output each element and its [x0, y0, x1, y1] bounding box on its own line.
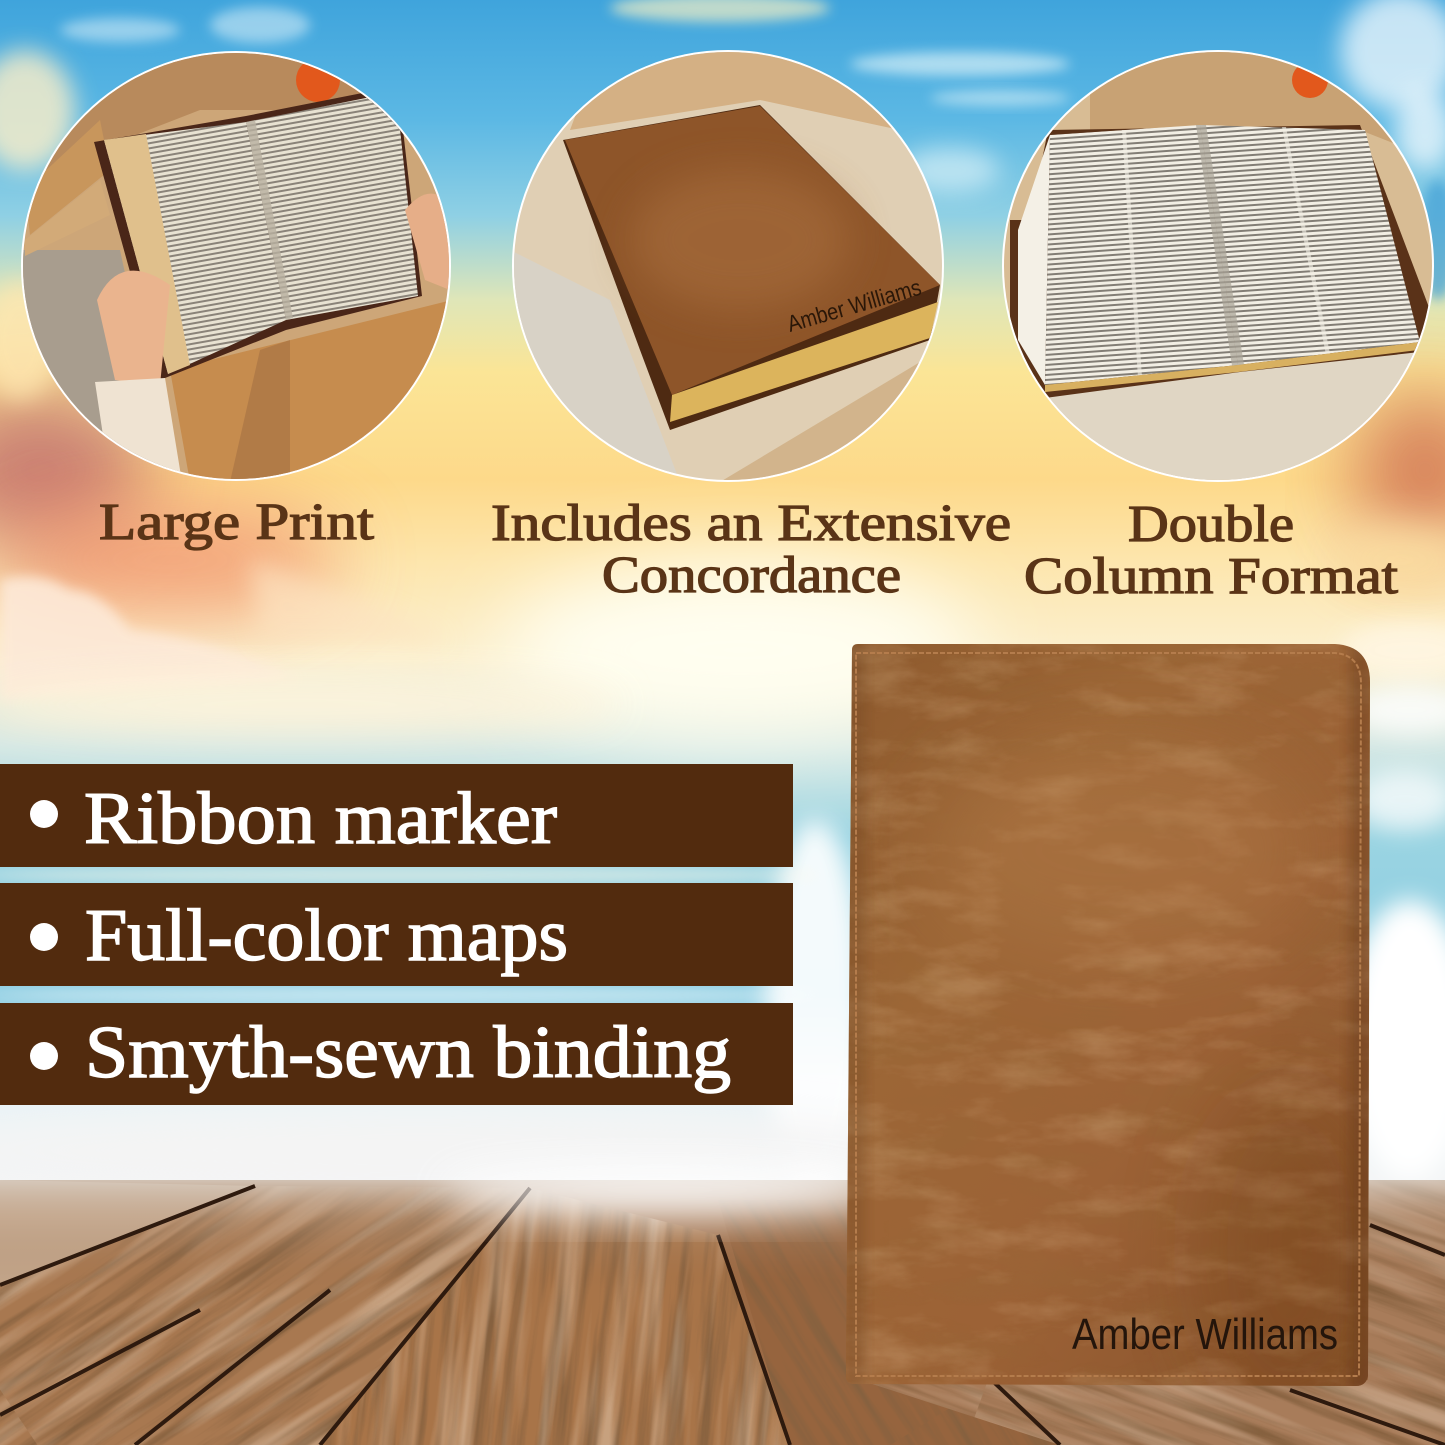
engraved name: Amber Williams	[1072, 1310, 1338, 1359]
caption: Large Print: Large Print	[99, 494, 375, 551]
photo circle: large print open book held in hands	[20, 50, 452, 482]
feature bar: full-color maps	[0, 883, 793, 986]
feature bar: ribbon marker	[0, 764, 793, 867]
caption: Includes an Extensive Concordance: Includes an Extensive	[491, 495, 1011, 552]
feature bar: ribbon marker: Ribbon marker	[84, 778, 557, 860]
feature bar: smyth-sewn binding: Smyth-sewn binding	[85, 1012, 731, 1094]
caption: Double Column Format: Column Format	[1024, 548, 1399, 605]
caption: Double Column Format	[1024, 496, 1399, 605]
photo circle: double column open book	[1000, 50, 1436, 482]
feature bar: full-color maps: Full-color maps	[85, 895, 568, 977]
leather book cover	[845, 640, 1380, 1420]
wooden table floor	[0, 1164, 1445, 1445]
caption: Includes an Extensive Concordance	[491, 495, 1011, 604]
photo circle: closed leather book with gold edges: Amber Williams	[784, 274, 924, 337]
photo circle: closed leather book with gold edges	[510, 50, 946, 482]
feature bar: smyth-sewn binding	[0, 1003, 793, 1105]
caption: Double Column Format: Double	[1128, 496, 1294, 553]
caption: Includes an Extensive Concordance: Concordance	[602, 547, 901, 604]
